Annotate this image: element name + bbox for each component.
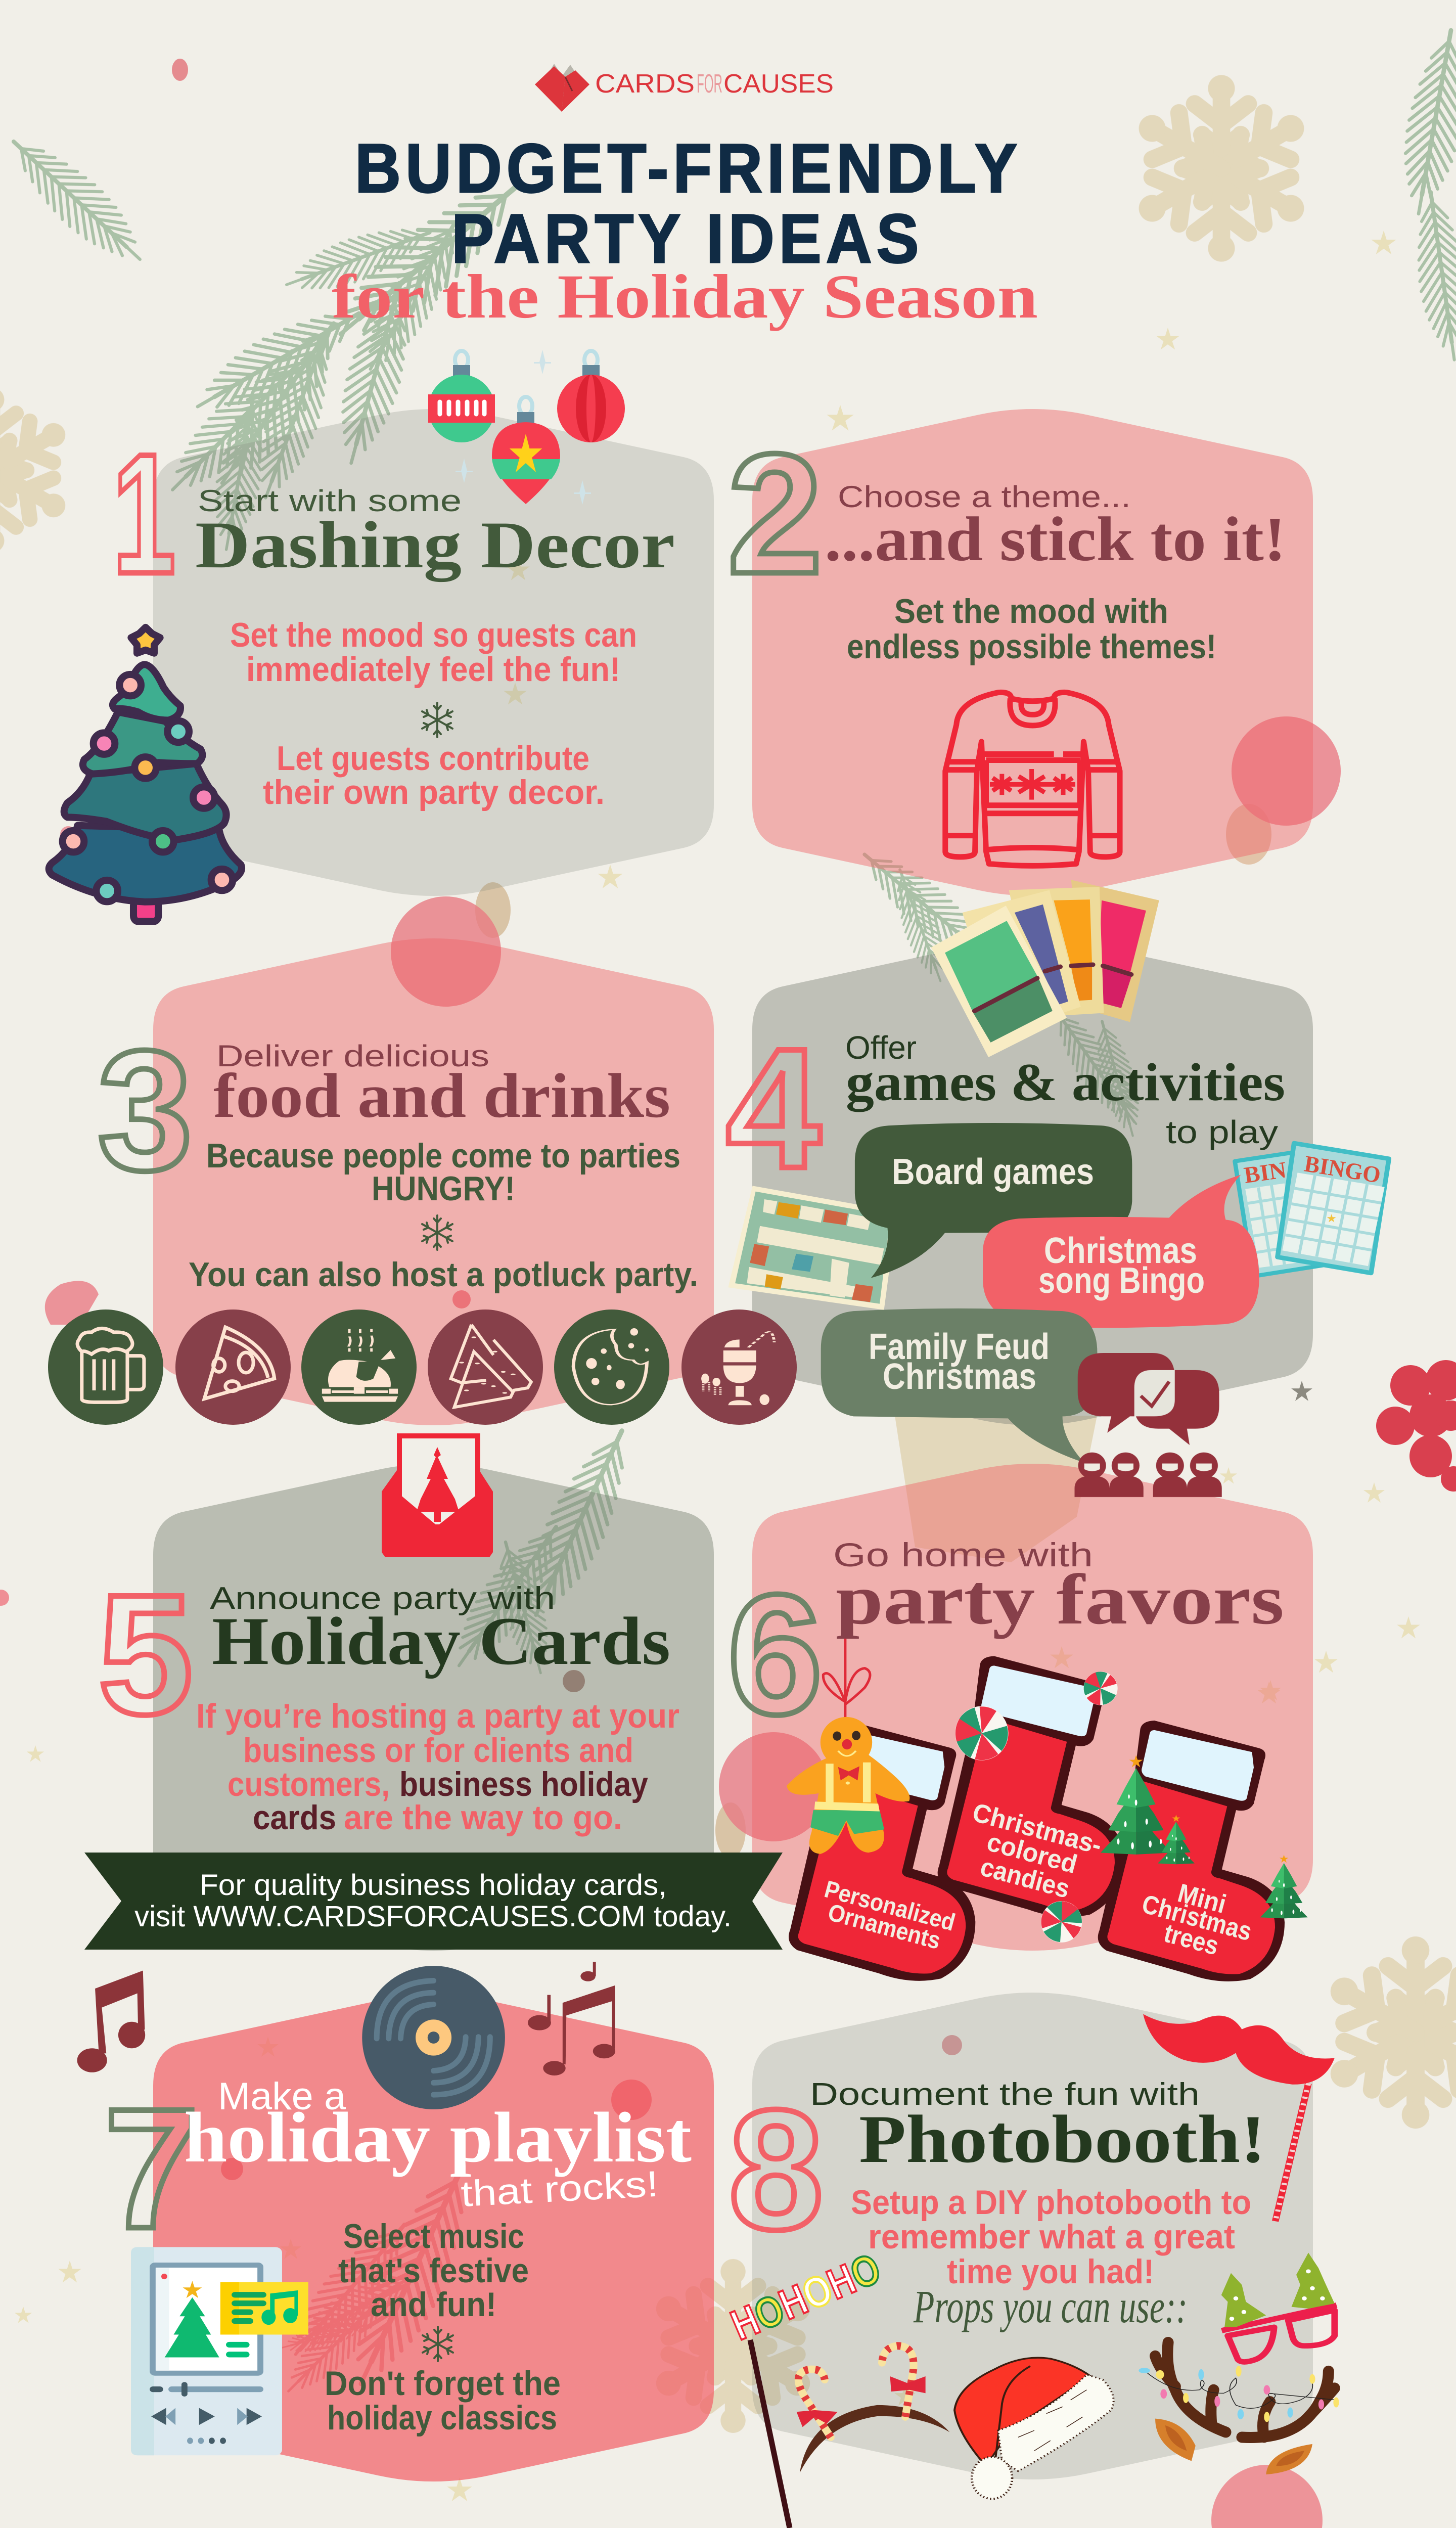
icon: roast turkey xyxy=(301,1310,417,1425)
panel 4 heading: Offer xyxy=(845,1029,917,1066)
panel 7 heading: Make a xyxy=(218,2075,346,2118)
panel 7 body text: that's festive xyxy=(338,2251,529,2290)
panel 3 heading: Deliver delicious xyxy=(216,1039,489,1073)
stocking: personalized ornaments: Personalized xyxy=(822,1876,958,1936)
panel 5: holiday cards xyxy=(84,1436,783,1951)
icon: pizza slice xyxy=(175,1310,291,1425)
panel 6 heading xyxy=(833,1536,1284,1639)
food icons row xyxy=(48,1310,797,1425)
logo: cards for causes: CAUSES xyxy=(723,69,834,99)
icon: board game xyxy=(728,1186,897,1310)
panel 5 body text: If you’re hosting a party at your xyxy=(196,1697,679,1735)
panel 4 heading: games & activities xyxy=(846,1053,1285,1112)
panel 6: party favors xyxy=(727,1464,1313,1981)
panel 7 body text: and fun! xyxy=(371,2285,496,2324)
panel 1 body text: their own party decor. xyxy=(263,773,605,811)
panel 2 number: 2 xyxy=(727,418,823,609)
props caption: Props you can use:: xyxy=(913,2281,1188,2332)
panel 5 number: 5 xyxy=(98,1559,193,1750)
panel 1: dashing decor xyxy=(49,350,714,922)
panel 4 heading xyxy=(845,1029,1285,1150)
icon: ugly christmas sweater xyxy=(945,692,1120,866)
panel 4: games and activities xyxy=(726,880,1389,1497)
panel 7 body text: Select music xyxy=(343,2217,524,2255)
banner: business holiday cards call to action xyxy=(84,1853,783,1950)
icon: hanging ornaments xyxy=(428,350,625,505)
panel 6 heading: party favors xyxy=(836,1559,1284,1639)
icon: snowflake divider xyxy=(422,1215,452,1250)
panel 3 body text: You can also host a potluck party. xyxy=(189,1255,698,1294)
panel 2 background xyxy=(752,409,1313,896)
panel 4 number: 4 xyxy=(726,1013,822,1204)
panel 7 number: 7 xyxy=(104,2073,199,2264)
panel 2 body text xyxy=(847,592,1216,666)
icon: music notes xyxy=(77,1962,615,2075)
icon: music player xyxy=(131,2247,308,2455)
stocking: mini christmas trees: trees xyxy=(1161,1918,1222,1961)
panel 2 body text: endless possible themes! xyxy=(847,627,1216,666)
panel 1 heading xyxy=(195,484,675,582)
title: for the Holiday Season xyxy=(332,262,1038,331)
panel 4 heading: to play xyxy=(1166,1114,1278,1150)
prop: santa hat xyxy=(954,2358,1114,2499)
banner: business holiday cards call to action: For quality business holiday cards, xyxy=(200,1869,667,1902)
prop: hohoho sign: HOHOHO xyxy=(724,2244,887,2349)
panel 3 body text xyxy=(189,1137,698,1294)
speech bubble: christmas song bingo: song Bingo xyxy=(1038,1260,1205,1301)
prop: hohoho sign xyxy=(724,2244,887,2528)
panel 2 heading: Choose a theme... xyxy=(838,480,1131,514)
icon: nachos xyxy=(428,1310,543,1425)
panel 8 body text: remember what a great xyxy=(868,2218,1235,2256)
title: PARTY IDEAS xyxy=(451,200,919,277)
panel 3 body text: HUNGRY! xyxy=(372,1169,515,1208)
panel 7 background xyxy=(153,1995,714,2481)
panel 1 heading: Dashing Decor xyxy=(195,508,675,582)
panel 7 body text: Don't forget the xyxy=(325,2364,561,2403)
speech bubble: family feud christmas xyxy=(821,1308,1097,1463)
icon: christmas tree xyxy=(49,627,242,922)
panel 5 background xyxy=(153,1464,714,1951)
panel 7 body text: holiday classics xyxy=(327,2399,557,2437)
stocking: christmas-colored candies: candies xyxy=(977,1852,1073,1904)
panel 3 number: 3 xyxy=(98,1015,193,1206)
icon: bingo cards xyxy=(1235,1143,1389,1276)
panel 5 heading: Announce party with xyxy=(210,1581,555,1616)
icon: snowflake divider xyxy=(423,2327,453,2361)
speech bubble: christmas song bingo: Christmas xyxy=(1044,1231,1197,1271)
prop: antlers with lights and ears xyxy=(1139,2342,1339,2474)
stocking: personalized ornaments xyxy=(789,1720,975,1981)
icon: bingo cards: BIN xyxy=(1242,1157,1288,1188)
icon: fanned playing cards xyxy=(931,880,1159,1057)
stocking: christmas-colored candies: colored xyxy=(984,1827,1080,1879)
stocking: mini christmas trees: Christmas xyxy=(1139,1889,1255,1947)
panel 3 body text: Because people come to parties xyxy=(206,1137,680,1175)
panel 4 background xyxy=(752,938,1313,1425)
panel 8 body text xyxy=(851,2183,1251,2291)
stockings illustration xyxy=(787,1639,1308,1981)
icon: gingerbread ornament xyxy=(787,1639,909,1854)
icon: cookie xyxy=(554,1310,669,1425)
panel 2 heading: ...and stick to it! xyxy=(825,505,1286,574)
panel 8 heading xyxy=(810,2077,1266,2177)
prop: candy cane headband xyxy=(797,2346,949,2473)
panel 3 background xyxy=(153,938,714,1425)
panel 6 number: 6 xyxy=(727,1559,823,1750)
panel 8 body text: time you had! xyxy=(947,2252,1154,2291)
speech bubble: board games: Board games xyxy=(892,1152,1094,1192)
panel 1 number: 1 xyxy=(112,418,176,609)
prop: mustache on a stick xyxy=(1143,2014,1335,2221)
panel 7 heading: holiday playlist xyxy=(184,2097,692,2177)
panel 5 heading: Holiday Cards xyxy=(212,1604,670,1679)
stocking: mini christmas trees xyxy=(1098,1721,1285,1981)
icon: beer mug xyxy=(48,1310,163,1425)
panel 8: photobooth xyxy=(724,1993,1339,2528)
icon: snowflake divider xyxy=(422,703,452,737)
speech bubble: family feud christmas: Christmas xyxy=(883,1357,1036,1397)
panel 8 body text: Setup a DIY photobooth to xyxy=(851,2183,1251,2222)
panel 7 body text xyxy=(325,2217,561,2437)
panel 6 heading: Go home with xyxy=(833,1536,1093,1573)
stocking: christmas-colored candies xyxy=(938,1656,1124,1917)
panel 2 body text: Set the mood with xyxy=(894,592,1168,630)
speech bubble: christmas song bingo xyxy=(983,1175,1259,1328)
panel 5 body text: are the way to go. xyxy=(344,1798,622,1837)
icon: bingo cards: BINGO xyxy=(1302,1151,1383,1188)
candies and mini trees xyxy=(941,1660,1308,1956)
panel 1 heading: Start with some xyxy=(198,484,462,518)
speech bubble: family feud christmas: Family Feud xyxy=(869,1327,1050,1367)
panel 3 heading: food and drinks xyxy=(213,1061,670,1131)
stocking: mini christmas trees: Mini xyxy=(1175,1878,1229,1919)
panel 7: holiday playlist xyxy=(77,1962,714,2481)
panel 2: choose a theme xyxy=(727,409,1313,896)
panel 5 body text: customers, xyxy=(228,1765,390,1803)
panel 8 number: 8 xyxy=(729,2074,824,2265)
panel 7 heading xyxy=(184,2075,692,2215)
panel 5 body text xyxy=(196,1697,679,1837)
panel 5 body text: business or for clients and xyxy=(243,1731,633,1770)
logo: cards for causes xyxy=(535,64,834,112)
stocking: personalized ornaments: Ornaments xyxy=(825,1899,943,1955)
icon: dessert drink xyxy=(681,1310,797,1425)
panel 1 background xyxy=(153,409,714,896)
icon: holiday card in envelope xyxy=(382,1436,493,1557)
panel 3: food and drinks xyxy=(48,938,797,1425)
title xyxy=(332,129,1038,331)
stocking: christmas-colored candies: Christmas- xyxy=(969,1798,1105,1860)
panel 1 body text: immediately feel the fun! xyxy=(246,650,620,689)
panel 8 heading: Document the fun with xyxy=(810,2077,1200,2112)
panel 5 body text: business holiday xyxy=(399,1765,648,1803)
panel 2 heading xyxy=(825,480,1286,574)
panel 7 heading: that rocks! xyxy=(460,2164,659,2215)
panel 1 body text: Set the mood so guests can xyxy=(230,616,637,654)
panel 8 background xyxy=(752,1993,1313,2479)
logo: cards for causes: FOR xyxy=(697,69,722,99)
banner: business holiday cards call to action: visit WWW.CARDSFORCAUSES.COM today. xyxy=(134,1900,732,1933)
panel 1 body text: Let guests contribute xyxy=(277,739,589,778)
panel 8 heading: Photobooth! xyxy=(859,2102,1266,2177)
panel 5 body text: cards xyxy=(253,1798,336,1837)
panel 1 body text xyxy=(230,616,637,811)
title: BUDGET-FRIENDLY xyxy=(355,129,1017,207)
prop: tree glasses xyxy=(1221,2253,1337,2362)
icon: audience with chat bubbles xyxy=(1075,1353,1222,1497)
icon: vinyl record xyxy=(362,1966,505,2109)
panel 6 background xyxy=(752,1464,1313,1951)
logo: cards for causes: CARDS xyxy=(595,69,695,99)
speech bubble: board games xyxy=(855,1123,1132,1278)
